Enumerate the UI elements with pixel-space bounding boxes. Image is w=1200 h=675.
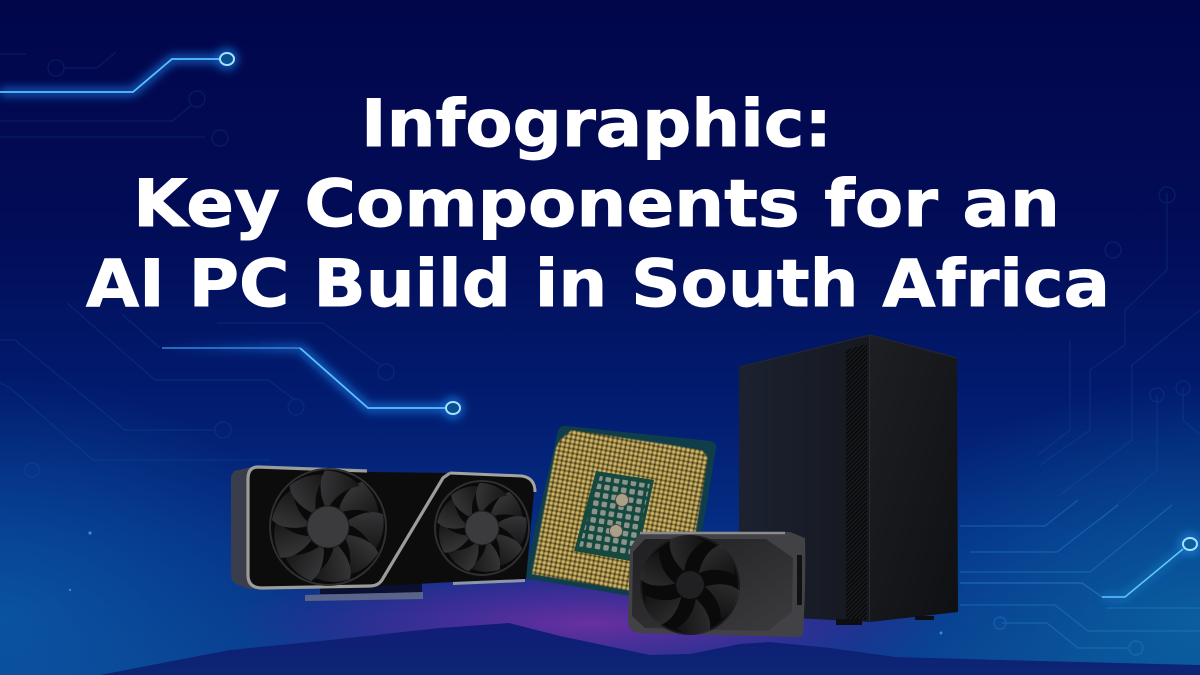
CPU substrate [525, 426, 716, 606]
CPU center die [574, 471, 654, 562]
GPU silver frame right [450, 473, 535, 492]
large graphics card [231, 460, 536, 601]
bright circuit trace: middle left [162, 348, 460, 415]
purple hills [100, 540, 1200, 675]
bright circuit trace: right [960, 537, 1197, 597]
mini GPU top highlight [640, 532, 785, 534]
GPU bottom right rail [453, 579, 525, 585]
case feet [836, 616, 934, 625]
small graphics card [628, 526, 805, 644]
mini GPU side slot [797, 555, 802, 605]
title [86, 87, 1110, 322]
mini GPU outer body [628, 532, 805, 637]
GPU silver frame left [248, 467, 450, 588]
title line 2: Key Components for an [133, 167, 1060, 242]
background glow right [700, 330, 1200, 675]
case corner edge [868, 335, 870, 622]
case mesh vent [846, 344, 867, 620]
CPU processor [525, 426, 716, 606]
CPU die contact pads [579, 476, 650, 557]
bright circuit trace: top left [0, 52, 234, 92]
sparkles [69, 531, 943, 634]
case top edge [739, 335, 957, 367]
title line 1: Infographic: [361, 87, 832, 162]
faint circuit traces lower right [960, 500, 1200, 655]
fan 1 [264, 460, 396, 593]
CPU capacitor bottom [610, 524, 622, 538]
title line 3: AI PC Build in South Africa [86, 247, 1110, 322]
case front panel [739, 335, 870, 622]
GPU bracket [305, 592, 423, 601]
hill dark foreground [100, 623, 1200, 675]
faint circuit traces [0, 52, 1200, 520]
hill glow [230, 540, 950, 675]
PC tower case [739, 335, 958, 625]
mini GPU face [632, 539, 793, 631]
GPU bracket mount [320, 583, 422, 594]
CPU gold pins [532, 430, 708, 600]
fan 2 [431, 474, 536, 581]
GPU side [231, 467, 252, 590]
case side panel [870, 335, 958, 622]
GPU black body [249, 468, 534, 588]
mini GPU fan [633, 526, 747, 644]
background glow left [0, 300, 500, 675]
CPU capacitor top [616, 494, 628, 506]
